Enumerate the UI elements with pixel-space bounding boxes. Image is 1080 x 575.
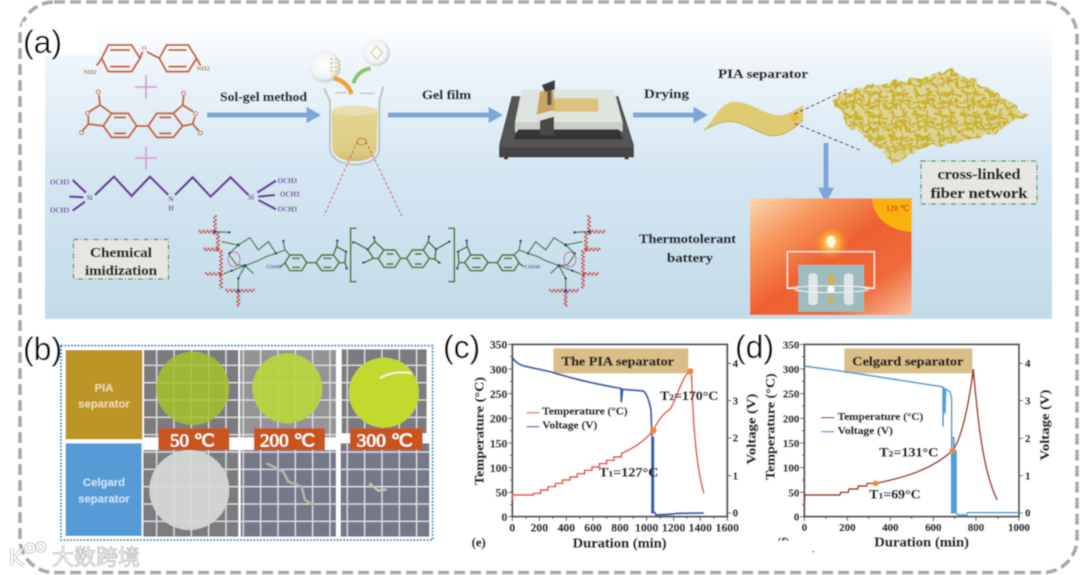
arrow: gel film [388, 111, 498, 119]
photo: PIA at 200 C [240, 350, 336, 437]
right axis voltage values: 1 [733, 470, 738, 482]
temperature label 200 C [254, 428, 325, 451]
callout: cross-linked fiber network: cross-linked [938, 167, 1020, 183]
arrow: drying [633, 111, 703, 119]
temperature label 300 C: 300 ℃ [357, 431, 413, 451]
plus sign two [135, 146, 157, 170]
label: thermotolerant battery: battery [667, 250, 714, 265]
label (b): (b) [23, 331, 62, 367]
y axis title: Temperature (°C) [763, 373, 777, 480]
chart title tag [553, 348, 688, 373]
label: gel film: Gel film [422, 87, 471, 102]
photo: Celgard at 200 C [241, 450, 336, 537]
polymer side group labels: COOH [266, 265, 281, 270]
right axis voltage values: 4 [733, 358, 739, 370]
polymer side group labels [266, 265, 540, 270]
y axis temperature values: 200 [490, 413, 507, 426]
voltage curve [804, 366, 1019, 515]
right axis voltage values: 4 [1025, 358, 1031, 370]
callout: cross-linked fiber network [921, 161, 1037, 204]
Celgard separator row label: separator [78, 494, 130, 506]
T1 annotation: T1=127°C [599, 466, 658, 480]
y axis temperature values: 100 [783, 463, 800, 475]
callout: chemical imidization: Chemical [90, 246, 152, 261]
y axis temperature values: 100 [490, 462, 507, 475]
polymer repeat unit [351, 228, 454, 282]
PIA separator row label: separator [78, 398, 130, 410]
temperature curve [804, 369, 997, 503]
silane molecule: H [168, 205, 174, 213]
voltage curve [512, 357, 704, 515]
white band between rows [143, 438, 427, 443]
x axis duration values: 200 [839, 522, 856, 534]
legend: Temperature (°C) [542, 406, 628, 417]
polymer right end group [456, 215, 606, 307]
y axis temperature values: 0 [794, 512, 800, 524]
arrow: sol-gel [207, 111, 316, 119]
x axis duration values: 600 [925, 522, 942, 534]
y axis temperature values: 50 [496, 487, 507, 500]
right axis voltage values: 0 [1025, 508, 1031, 520]
x axis duration values [509, 522, 739, 535]
x axis duration values: 400 [558, 522, 575, 535]
y axis temperature values [783, 339, 800, 524]
chart title tag [844, 348, 972, 373]
photo: Celgard at 300 C [341, 443, 429, 537]
diamine molecule: NH2 [83, 69, 97, 76]
legend [821, 412, 923, 437]
y axis temperature values: 250 [490, 388, 507, 401]
x axis duration values: 400 [882, 522, 899, 534]
label (c): (c) [443, 329, 480, 365]
right axis voltage values [1025, 358, 1031, 520]
callout: chemical imidization [74, 240, 168, 279]
cross-linked fiber network [833, 70, 1027, 165]
left voltage title belonging to chart c: Voltage (V) [744, 394, 758, 464]
x axis duration values: 0 [802, 522, 808, 534]
photo: Celgard at 50 C [143, 450, 238, 537]
silane molecule: N [168, 196, 173, 204]
panel: separator photo grid [61, 346, 433, 540]
silane molecule: Si [87, 194, 93, 202]
chart title tag: The PIA separator [562, 355, 674, 369]
right axis voltage values: 2 [1025, 433, 1031, 445]
silane molecule [50, 177, 300, 215]
y axis temperature values: 300 [783, 364, 800, 376]
sub-label f clipped: (f) [777, 536, 790, 550]
label (a): (a) [23, 24, 62, 60]
right axis voltage values: 2 [733, 433, 739, 445]
dianhydride molecule [80, 90, 202, 137]
T2 annotation: T2=131°C [879, 446, 938, 460]
legend [527, 406, 628, 432]
right axis voltage values: 3 [1025, 395, 1031, 407]
silane molecule: OCH3 [50, 207, 70, 215]
diamine molecule: O [142, 45, 147, 52]
x axis duration values: 800 [968, 522, 985, 534]
diamine molecule: NH2 [197, 66, 211, 73]
temperature label 50 C: 50 ℃ [170, 431, 215, 451]
x axis duration values: 1200 [662, 522, 685, 535]
plus sign one [135, 75, 157, 99]
sub-label e: (e) [472, 536, 486, 550]
label: sol-gel method: Sol-gel method [220, 89, 308, 104]
voltage collapse markers [650, 368, 694, 434]
x axis duration values: 800 [611, 522, 629, 535]
arrow: down to battery [822, 143, 830, 198]
panel label a backing [22, 22, 97, 55]
chart: Celgard separator temperature and voltage [744, 339, 1052, 552]
x axis duration values: 600 [584, 522, 602, 535]
silane molecule: OCH3 [278, 177, 298, 185]
y axis temperature values: 150 [490, 437, 507, 450]
Celgard separator row label [66, 443, 142, 536]
watermark text: 大数跨境 [52, 545, 140, 570]
polymer side group labels: COOH [525, 265, 540, 270]
y axis temperature values: 300 [490, 363, 507, 376]
sub-label f clipped [775, 536, 796, 551]
Celgard separator row label: Celgard [83, 477, 125, 489]
silane molecule: OCH3 [280, 190, 300, 198]
y axis temperature values: 200 [783, 413, 800, 425]
y axis temperature values: 350 [783, 339, 800, 351]
x axis duration values: 1600 [716, 522, 739, 535]
label: thermotolerant battery [639, 231, 737, 265]
PIA separator film [704, 88, 860, 150]
thermotolerant battery illustration [750, 198, 912, 315]
y axis temperature values: 150 [783, 438, 800, 450]
label: PIA separator: PIA separator [718, 66, 808, 81]
film coater machine [499, 80, 634, 159]
photo: PIA at 50 C [144, 350, 238, 437]
right axis voltage values: 0 [733, 508, 739, 520]
T1 annotation: T1=69°C [869, 488, 921, 502]
diamine molecule [83, 45, 211, 76]
PIA separator row label [66, 350, 142, 439]
temperature label 50 C [158, 428, 229, 451]
legend: Voltage (V) [542, 421, 597, 432]
photo: PIA at 300 C [342, 349, 427, 433]
right axis voltage values: 1 [1025, 470, 1030, 482]
silane molecule: OCH3 [50, 178, 70, 186]
label: drying: Drying [644, 86, 690, 101]
y axis temperature values: 0 [501, 511, 507, 524]
callout: chemical imidization: imidization [85, 264, 157, 279]
x axis duration values: 1000 [635, 522, 658, 535]
silane molecule: OCH3 [278, 205, 298, 213]
x axis duration values: 1400 [689, 522, 712, 535]
legend: Voltage (V) [838, 426, 893, 437]
thermotolerant battery illustration: 120 ℃ [886, 204, 909, 213]
temperature curve [512, 371, 704, 500]
label: thermotolerant battery: Thermotolerant [639, 231, 737, 246]
x axis duration values: 1000 [1008, 522, 1030, 534]
x axis duration values: 200 [531, 522, 548, 535]
chart: PIA separator temperature and voltage [472, 339, 739, 550]
right axis voltage values: 3 [733, 395, 739, 407]
panel: synthesis schematic background [45, 25, 1052, 319]
y axis title: Temperature (°C) [473, 377, 487, 485]
x axis title: Duration (min) [874, 535, 969, 550]
T2 annotation: T2=170°C [660, 389, 718, 403]
x axis duration values: 0 [509, 522, 515, 535]
PIA separator row label: PIA [95, 383, 113, 395]
chart title tag: Celgard separator [852, 355, 964, 369]
x axis duration values [802, 522, 1030, 534]
right y axis title: Voltage (V) [1038, 390, 1052, 460]
watermark logo [12, 543, 45, 566]
x axis title: Duration (min) [573, 535, 667, 550]
polymer structure [198, 215, 606, 307]
y axis temperature values: 250 [783, 389, 800, 401]
temperature label 200 C: 200 ℃ [260, 431, 315, 451]
temperature label 300 C [350, 428, 423, 451]
silane molecule: Si [248, 193, 254, 201]
polymer left end group [198, 215, 348, 307]
legend: Temperature (°C) [838, 412, 923, 423]
y axis temperature values [490, 339, 507, 524]
right axis voltage values [733, 358, 739, 520]
y axis temperature values: 50 [788, 487, 800, 499]
label (d): (d) [735, 329, 774, 365]
y axis temperature values: 350 [490, 339, 507, 352]
failure markers [873, 448, 955, 486]
callout: cross-linked fiber network: fiber network [930, 186, 1029, 202]
beaker with reagents [309, 39, 402, 216]
